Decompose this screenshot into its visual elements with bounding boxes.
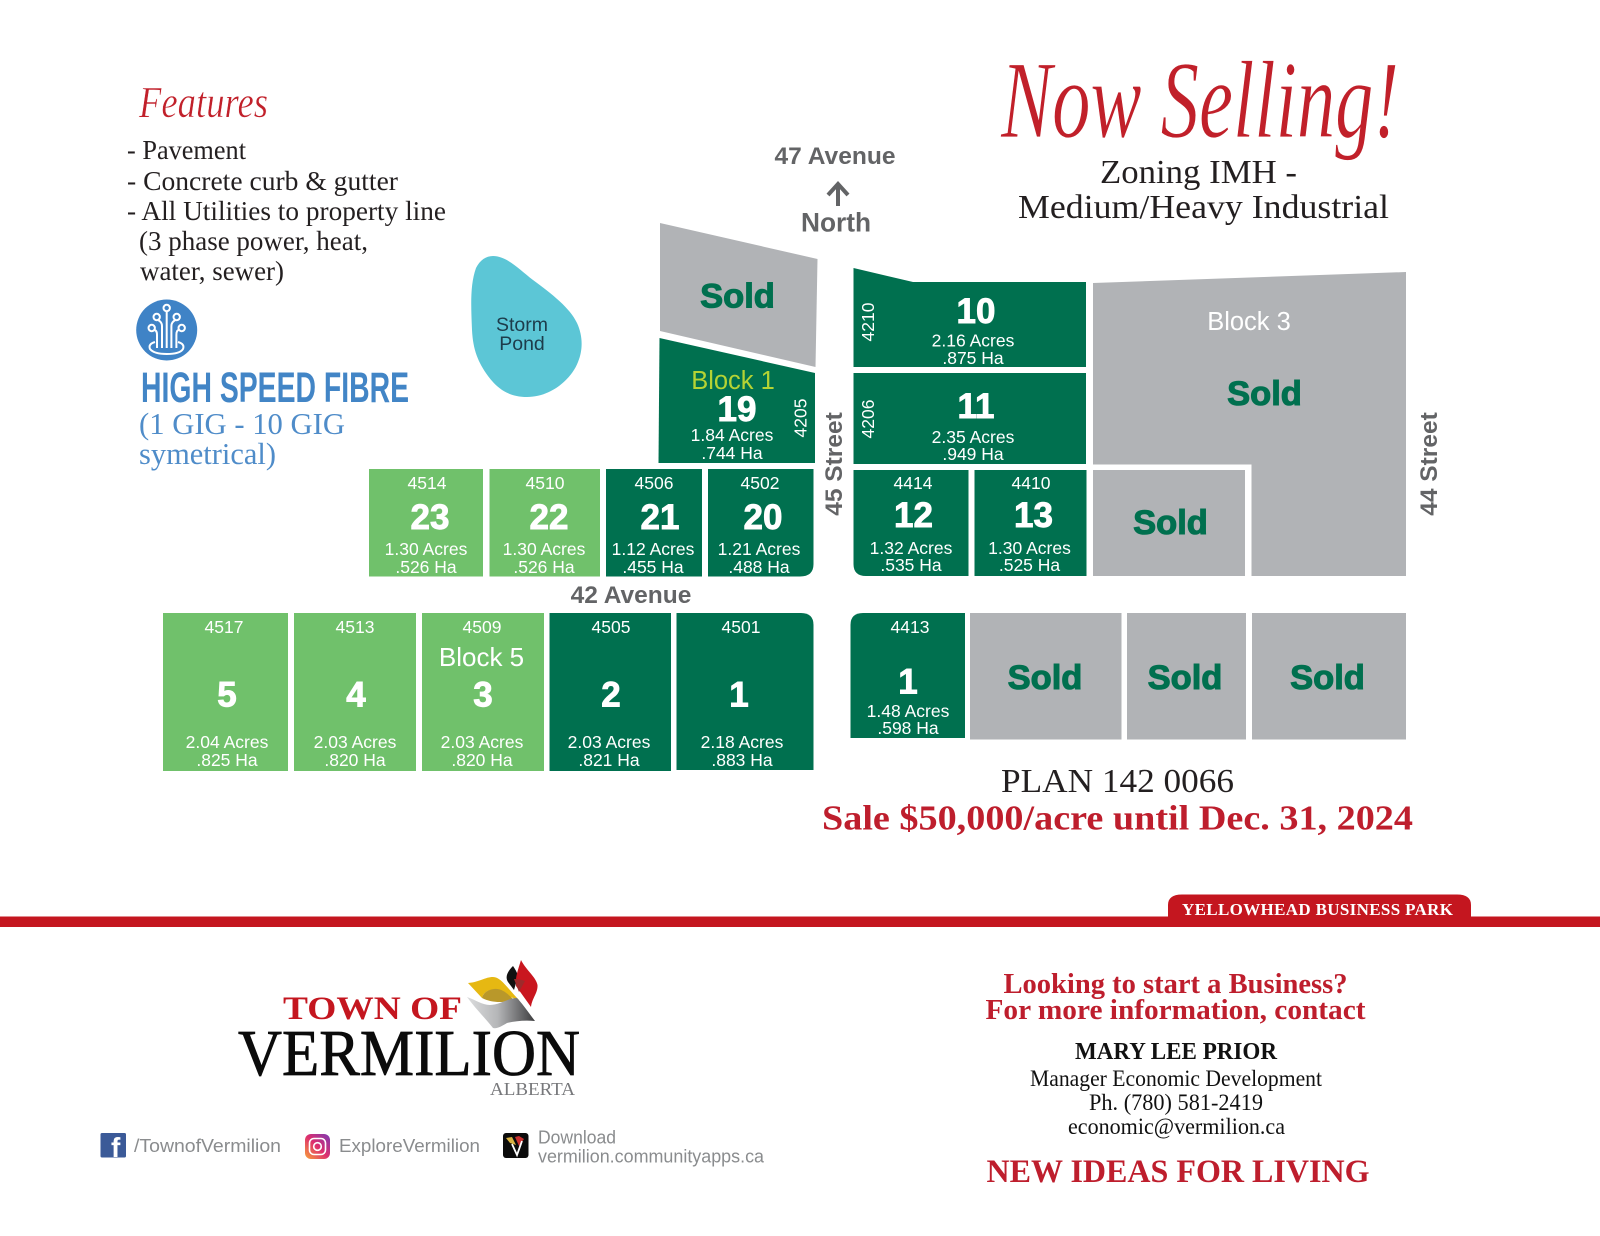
block 3 sold: Block 3 (1207, 308, 1291, 336)
lot 4 (294, 613, 416, 771)
lot 20 (708, 469, 814, 577)
lot 13: .525 Ha (999, 555, 1060, 575)
lot 12: 4414 (894, 473, 933, 493)
lot 12 (854, 470, 968, 576)
lot 20: 1.21 Acres (718, 539, 801, 559)
fibre speed text (139, 406, 345, 471)
contact heading: For more information, contact (986, 995, 1366, 1026)
lot 21: 1.12 Acres (612, 539, 695, 559)
lot 11 (854, 373, 1086, 464)
block 1 (658, 223, 818, 463)
slogan: NEW IDEAS FOR LIVING (986, 1154, 1370, 1190)
features list (127, 135, 446, 286)
zoning text: Zoning IMH - (1100, 154, 1297, 191)
north arrow and 47 avenue (774, 143, 896, 238)
fibre speed text: (1 GIG - 10 GIG (139, 406, 345, 441)
lot 10 (854, 268, 1086, 368)
lot 1: 4501 (722, 617, 760, 637)
lot 12: 1.32 Acres (870, 538, 953, 558)
42 avenue label: 42 Avenue (571, 582, 691, 609)
lot 10: 4210 (858, 302, 878, 341)
red banner (0, 894, 1600, 927)
lot 1 east: 1.48 Acres (867, 701, 950, 721)
lot 10: .875 Ha (942, 348, 1004, 368)
lot 13: 13 (1014, 496, 1053, 535)
zoning text: Medium/Heavy Industrial (1018, 189, 1389, 226)
alberta: ALBERTA (490, 1079, 575, 1099)
lower row lots east (850, 613, 1406, 740)
sold lot: Sold (1148, 659, 1222, 697)
lot 22: 1.30 Acres (503, 539, 586, 559)
lot 3: 2.03 Acres (441, 732, 524, 752)
lot 19: 4205 (790, 399, 810, 437)
lot 13: 4410 (1012, 473, 1051, 493)
lot 11: 4206 (858, 400, 878, 438)
lot 23: .526 Ha (395, 557, 457, 577)
lot 19: 1.84 Acres (691, 425, 774, 445)
lot 10: 2.16 Acres (932, 330, 1015, 350)
town of: TOWN OF (283, 991, 462, 1027)
upper row lots west (369, 469, 814, 577)
sold lot: Sold (1133, 504, 1208, 542)
lot 5: 2.04 Acres (186, 732, 269, 752)
44 street label: 44 Street (1416, 412, 1443, 516)
block 2 north lots (854, 268, 1086, 464)
social: facebook: f (111, 1132, 121, 1163)
lot 2: .821 Ha (578, 750, 640, 770)
lot 3: 3 (473, 676, 493, 714)
lot 22 (490, 469, 600, 577)
social: app download (503, 1126, 765, 1166)
lot 21: 21 (641, 498, 679, 537)
45 street label: 45 Street (821, 412, 848, 516)
lot 12: 12 (894, 496, 933, 535)
lot 19: Block 1 (691, 367, 775, 395)
lot 19: 19 (718, 390, 756, 429)
lot 1 east: .598 Ha (877, 718, 939, 738)
lot 1 east (850, 613, 965, 738)
block 3 sold: Sold (1227, 375, 1302, 413)
lot 22: 4510 (526, 473, 565, 493)
lot 1: 1 (729, 676, 749, 714)
icon: high speed fibre (136, 300, 197, 360)
features list: - Concrete curb & gutter (127, 166, 398, 196)
lot 21: .455 Ha (622, 557, 684, 577)
lot 3: Block 5 (439, 642, 524, 672)
features list: (3 phase power, heat, (139, 226, 368, 256)
lot 19: .744 Ha (701, 443, 763, 463)
lot 23: 1.30 Acres (385, 539, 468, 559)
upper row lots east (854, 470, 1245, 576)
lot 22: 22 (530, 498, 568, 537)
lot 4: 4513 (336, 617, 374, 637)
north arrow and 47 avenue: North (801, 208, 871, 238)
contact name: MARY LEE PRIOR (1075, 1039, 1278, 1065)
features panel (127, 78, 446, 286)
zoning text (1018, 154, 1389, 226)
features list: - All Utilities to property line (127, 196, 446, 226)
lot 3: 4509 (463, 617, 501, 637)
lot 11: .949 Ha (942, 444, 1004, 464)
lot 13: 1.30 Acres (988, 538, 1071, 558)
lot 5: 5 (217, 676, 237, 714)
lot 3: .820 Ha (451, 750, 513, 770)
sold lot (970, 613, 1122, 740)
social: instagram (305, 1134, 480, 1159)
contact heading (986, 969, 1366, 1026)
sold lot north (660, 223, 818, 367)
lot 23: 4514 (408, 473, 447, 493)
contact block (986, 969, 1370, 1190)
lot 4: 4 (346, 676, 366, 714)
lot 2: 2.03 Acres (568, 732, 651, 752)
vermilion: VERMILION (238, 1017, 580, 1090)
lot 21 (606, 469, 702, 577)
storm pond: Pond (499, 333, 545, 355)
lot 11: 11 (958, 387, 994, 426)
lot 1: .883 Ha (711, 750, 773, 770)
sold lot (1093, 470, 1245, 576)
contact heading: Looking to start a Business? (1004, 969, 1348, 1000)
sale price: Sale $50,000/acre until Dec. 31, 2024 (822, 798, 1413, 838)
lot 4: 2.03 Acres (314, 732, 397, 752)
lot 5 (163, 613, 288, 771)
lot 23 (369, 469, 483, 577)
contact details: Ph. (780) 581-2419 (1089, 1090, 1263, 1115)
north arrow and 47 avenue: 47 Avenue (774, 143, 896, 170)
storm pond: Storm (496, 314, 548, 336)
social: facebook: /TownofVermilion (134, 1135, 281, 1156)
fibre speed text: symetrical) (139, 436, 276, 471)
social: instagram: ExploreVermilion (339, 1135, 480, 1156)
lot 10: 10 (957, 292, 995, 331)
storm pond (471, 256, 582, 397)
sold lot (1127, 613, 1246, 740)
lot 13 (974, 470, 1086, 576)
features list: - Pavement (127, 135, 246, 165)
lot 22: .526 Ha (513, 557, 575, 577)
social: facebook (100, 1132, 281, 1163)
block 3 sold (1093, 272, 1406, 576)
lot 1 (676, 613, 814, 770)
features heading: Features (138, 78, 268, 127)
lot 1: 2.18 Acres (701, 732, 784, 752)
lot 20: .488 Ha (728, 557, 790, 577)
lot 19 (658, 338, 815, 463)
lot 5: .825 Ha (196, 750, 258, 770)
headline: now selling: Now Selling! (1000, 39, 1399, 161)
contact details: economic@vermilion.ca (1068, 1114, 1285, 1139)
plan number: PLAN 142 0066 (1001, 763, 1234, 800)
sold lot north: Sold (700, 278, 775, 316)
sold lot: Sold (1008, 659, 1082, 697)
logo mark (467, 960, 538, 1028)
sold lot: Sold (1290, 659, 1365, 697)
lot 20: 20 (744, 498, 782, 537)
lot 2: 2 (601, 676, 621, 714)
town of vermilion logo (238, 960, 580, 1099)
lot 20: 4502 (741, 473, 779, 493)
lot 12: .535 Ha (880, 555, 942, 575)
lot 23: 23 (411, 498, 449, 537)
lot 1 east: 4413 (891, 617, 929, 637)
social: app download: Download (538, 1126, 616, 1148)
lot 21: 4506 (635, 473, 673, 493)
lower row lots block 5 (163, 613, 814, 771)
red banner: YELLOWHEAD BUSINESS PARK (1182, 900, 1454, 919)
lot 5: 4517 (205, 617, 243, 637)
lot 1 east: 1 (898, 662, 918, 702)
lot 2: 4505 (592, 617, 630, 637)
fibre heading: HIGH SPEED FIBRE (141, 364, 409, 412)
contact details (1030, 1066, 1323, 1139)
sold lot (1252, 613, 1406, 740)
features list: water, sewer) (140, 256, 284, 286)
lot 4: .820 Ha (324, 750, 386, 770)
lot 11: 2.35 Acres (932, 427, 1015, 447)
contact details: Manager Economic Development (1030, 1066, 1323, 1091)
social: app download: vermilion.communityapps.ca (538, 1146, 765, 1166)
lot 2 (550, 613, 671, 771)
lot 3 (422, 613, 544, 771)
